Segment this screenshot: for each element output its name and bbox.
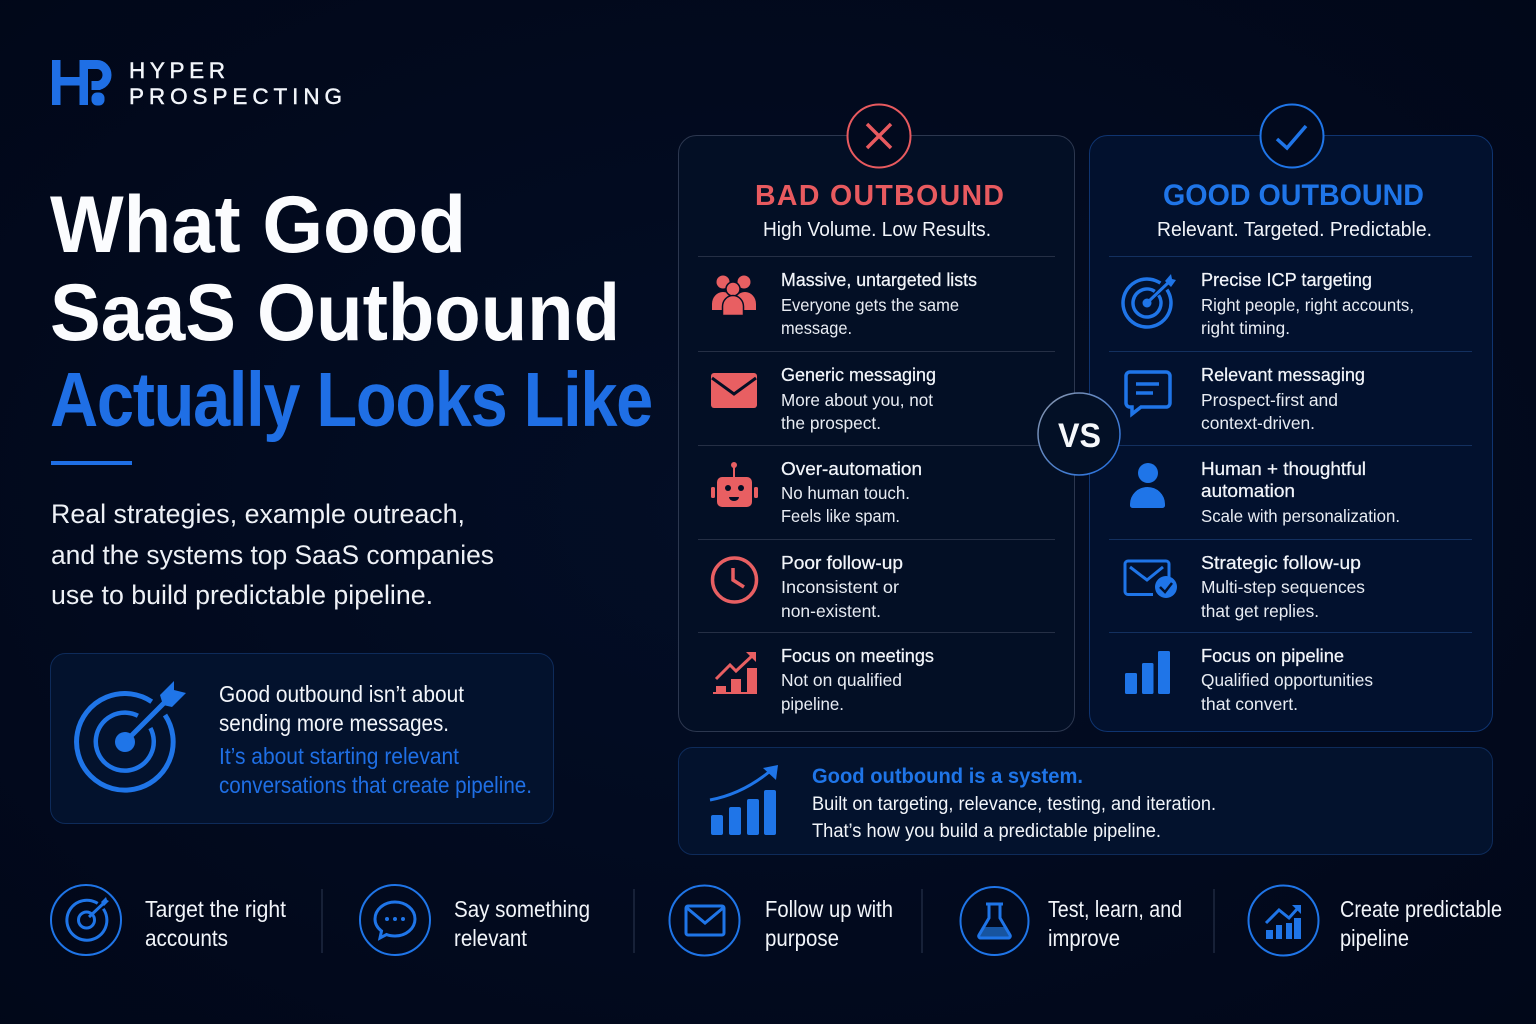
row text: Over-automation: [781, 458, 922, 479]
row text: [781, 552, 903, 621]
row text: Relevant messaging: [1201, 364, 1365, 385]
row: ICP targeting: [1123, 269, 1414, 338]
row text: More about you, not: [781, 390, 933, 410]
icon: chart with arrow: [713, 652, 757, 694]
icon: target with arrow: [77, 681, 186, 790]
row text: Feels like spam.: [781, 506, 900, 526]
row text: Inconsistent or: [781, 577, 899, 597]
title: Actually Looks Like: [50, 357, 652, 443]
row text: Prospect-first and: [1201, 390, 1338, 410]
row text: that convert.: [1201, 694, 1298, 714]
VS badge: VS: [1058, 417, 1101, 455]
logo wordmark: [129, 58, 342, 109]
label: Say something: [454, 896, 590, 922]
row text: message.: [781, 318, 852, 338]
row text: Multi-step sequences: [1201, 577, 1365, 597]
row text: [1201, 458, 1400, 526]
icon: growth chart: [710, 765, 778, 835]
label: Create predictable: [1340, 896, 1502, 922]
intro paragraph: [51, 499, 494, 610]
row text: Precise ICP targeting: [1201, 269, 1372, 290]
icon: rising chart in circle: [1248, 886, 1318, 956]
label: [1340, 896, 1502, 951]
row text: [781, 645, 934, 714]
label: relevant: [454, 925, 528, 951]
subheading: bad outbound: High Volume. Low Results.: [763, 218, 991, 241]
row: focus on meetings: [713, 645, 934, 714]
strip item: create predictable pipeline: [1248, 886, 1502, 956]
label: purpose: [765, 925, 839, 951]
banner text: Good outbound is a system.: [812, 765, 1083, 788]
logo wordmark: HYPER: [129, 58, 225, 83]
row text: Massive, untargeted lists: [781, 269, 977, 290]
title accent rule: [51, 461, 132, 465]
row text: No human touch.: [781, 483, 910, 503]
label: Target the right: [145, 896, 287, 922]
intro paragraph: and the systems top SaaS companies: [51, 540, 494, 570]
row text: [781, 269, 977, 338]
row text: context-driven.: [1201, 413, 1315, 433]
callout text: [219, 681, 532, 798]
icon: envelope in circle: [670, 886, 740, 956]
icon: target in circle: [51, 885, 121, 955]
icon: message bubble: [1126, 372, 1170, 414]
row text: Everyone gets the same: [781, 295, 959, 315]
row: focus on pipeline: [1125, 645, 1373, 714]
callout text: conversations that create pipeline.: [219, 772, 532, 798]
icon: target: [1123, 274, 1176, 327]
row text: [1201, 364, 1365, 433]
label: [145, 896, 287, 951]
row text: [781, 458, 922, 526]
label: pipeline: [1340, 925, 1409, 951]
icon: flask in circle: [960, 887, 1028, 955]
intro paragraph: use to build predictable pipeline.: [51, 580, 433, 610]
label: [765, 896, 893, 951]
subheading: good outbound: Relevant. Targeted. Predictable.: [1157, 218, 1432, 241]
row: over-automation: [711, 458, 922, 526]
callout text: It’s about starting relevant: [219, 743, 460, 769]
row text: Focus on meetings: [781, 645, 934, 666]
row: poor follow-up: [712, 552, 903, 621]
row: generic messaging: [711, 364, 936, 433]
icon: bars: [1125, 651, 1170, 694]
row text: right timing.: [1201, 318, 1290, 338]
banner text: Built on targeting, relevance, testing, and iteration.: [812, 794, 1216, 815]
heading: bad outbound: BAD OUTBOUND: [755, 180, 1004, 212]
row text: Poor follow-up: [781, 552, 903, 573]
row text: Qualified opportunities: [1201, 670, 1373, 690]
logo: [52, 58, 342, 109]
icon: clock: [712, 558, 756, 602]
row text: automation: [1201, 480, 1295, 501]
label: [1048, 896, 1182, 951]
label: Follow up with: [765, 896, 893, 922]
row text: Scale with personalization.: [1201, 506, 1400, 526]
row text: [781, 364, 936, 433]
callout text: sending more messages.: [219, 710, 449, 736]
panel: bad outbound: [678, 104, 1074, 732]
icon: HP logo mark: [52, 60, 107, 106]
row text: pipeline.: [781, 694, 844, 714]
icon: chat in circle: [360, 885, 430, 955]
icon: people: [712, 276, 756, 316]
icon: envelope: [711, 373, 757, 408]
row text: Not on qualified: [781, 670, 902, 690]
heading: good outbound: GOOD OUTBOUND: [1163, 179, 1424, 212]
icon: red X badge: [848, 104, 910, 168]
callout text: Good outbound isn’t about: [219, 681, 465, 707]
row text: [1201, 269, 1414, 338]
VS badge: [1038, 393, 1120, 475]
label: improve: [1048, 925, 1120, 951]
strip item: say something relevant: [360, 885, 590, 955]
title: What Good: [50, 180, 466, 270]
row text: Focus on pipeline: [1201, 645, 1344, 666]
row text: Human + thoughtful: [1201, 458, 1366, 479]
row text: Strategic follow-up: [1201, 552, 1361, 573]
label: Test, learn, and: [1048, 896, 1182, 922]
row text: Right people, right accounts,: [1201, 295, 1414, 315]
icon: person: [1130, 463, 1165, 508]
intro paragraph: Real strategies, example outreach,: [51, 499, 465, 529]
row: human plus automation: [1130, 458, 1400, 526]
banner: good outbound is a system: [678, 748, 1492, 854]
row: massive lists: [712, 269, 977, 338]
row: relevant messaging: [1126, 364, 1365, 433]
title: [50, 180, 652, 443]
label: accounts: [145, 925, 228, 951]
strip item: follow up with purpose: [670, 886, 893, 956]
title: SaaS Outbound: [50, 268, 620, 358]
row text: Generic messaging: [781, 364, 936, 385]
banner text: That’s how you build a predictable pipeline.: [812, 821, 1161, 842]
icon: blue check badge: [1260, 104, 1324, 168]
row text: non-existent.: [781, 601, 881, 621]
logo wordmark: PROSPECTING: [129, 84, 342, 109]
row text: [1201, 645, 1373, 714]
panel: good outbound: [1090, 104, 1492, 732]
row text: the prospect.: [781, 413, 881, 433]
icon: robot: [711, 462, 758, 507]
banner text: [812, 765, 1216, 842]
strip item: test, learn, improve: [960, 887, 1182, 955]
icon: envelope with check: [1125, 561, 1177, 598]
callout: good outbound definition: [50, 654, 554, 824]
row text: [1201, 552, 1365, 621]
label: [454, 896, 590, 951]
strip item: target the right accounts: [51, 885, 287, 955]
row text: that get replies.: [1201, 601, 1319, 621]
row: strategic follow-up: [1125, 552, 1365, 621]
